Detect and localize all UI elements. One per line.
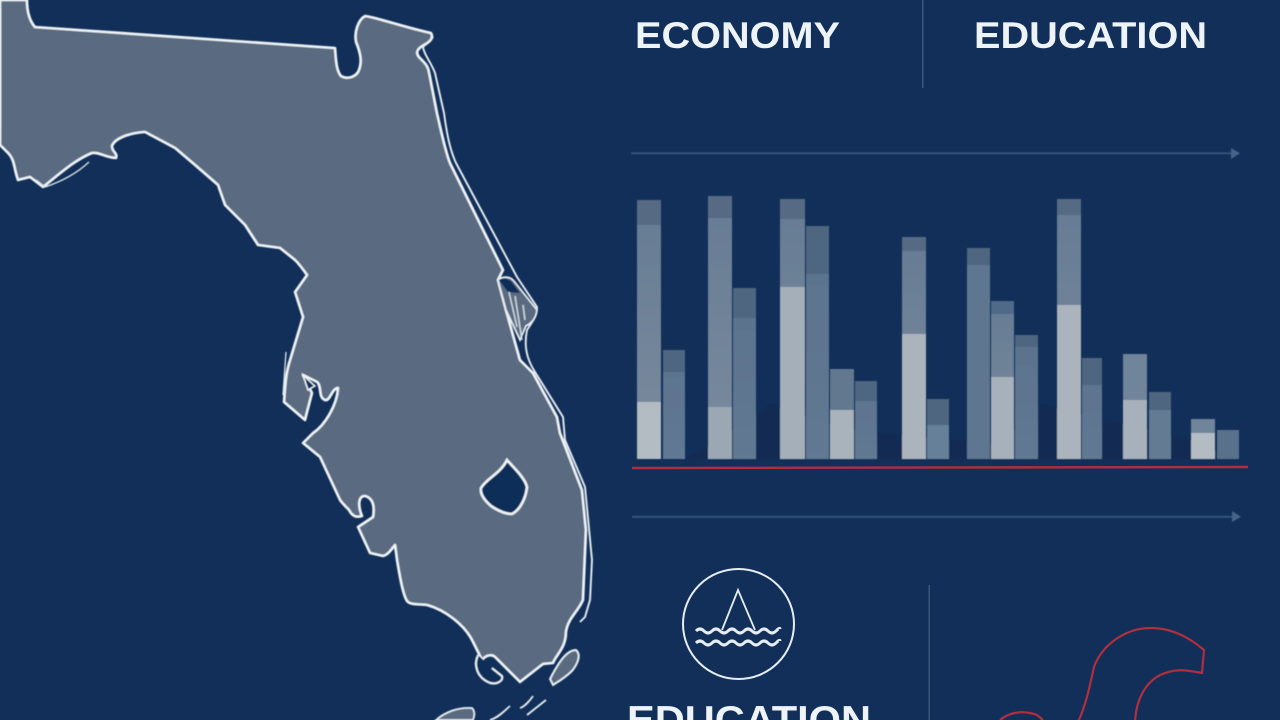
- Tampa Bay: [303, 375, 315, 390]
- panhandle barrier line: [36, 162, 89, 187]
- arrow: lower: [632, 511, 1241, 522]
- group 8: [1191, 419, 1239, 459]
- map: Florida: [0, 0, 592, 720]
- group 6: [1057, 199, 1102, 459]
- group 4: [902, 237, 949, 459]
- state shape: [0, 0, 586, 682]
- group 5: [967, 248, 1038, 459]
- red outline shape: [1000, 628, 1204, 720]
- group 2: [708, 196, 756, 459]
- bar chart: [637, 196, 1240, 460]
- Cape Sable loop: [476, 655, 502, 683]
- group 1: [637, 200, 685, 459]
- Cape Canaveral lagoon: [498, 277, 537, 340]
- vertical divider: top: [922, 0, 924, 88]
- heading: economy: ECONOMY: [635, 15, 840, 56]
- Florida Keys: [436, 696, 546, 720]
- Biscayne island: [550, 650, 579, 685]
- icon: sail on waves: [683, 569, 794, 679]
- east coast barrier line: [423, 37, 592, 622]
- heading: education: EDUCATION: [974, 15, 1207, 56]
- group 7: [1123, 354, 1171, 459]
- arrow: upper: [631, 148, 1240, 159]
- lake Okeechobee: [481, 460, 527, 514]
- baseline: red: [632, 467, 1248, 468]
- group 3: [780, 199, 877, 459]
- vertical divider: bottom: [928, 585, 930, 720]
